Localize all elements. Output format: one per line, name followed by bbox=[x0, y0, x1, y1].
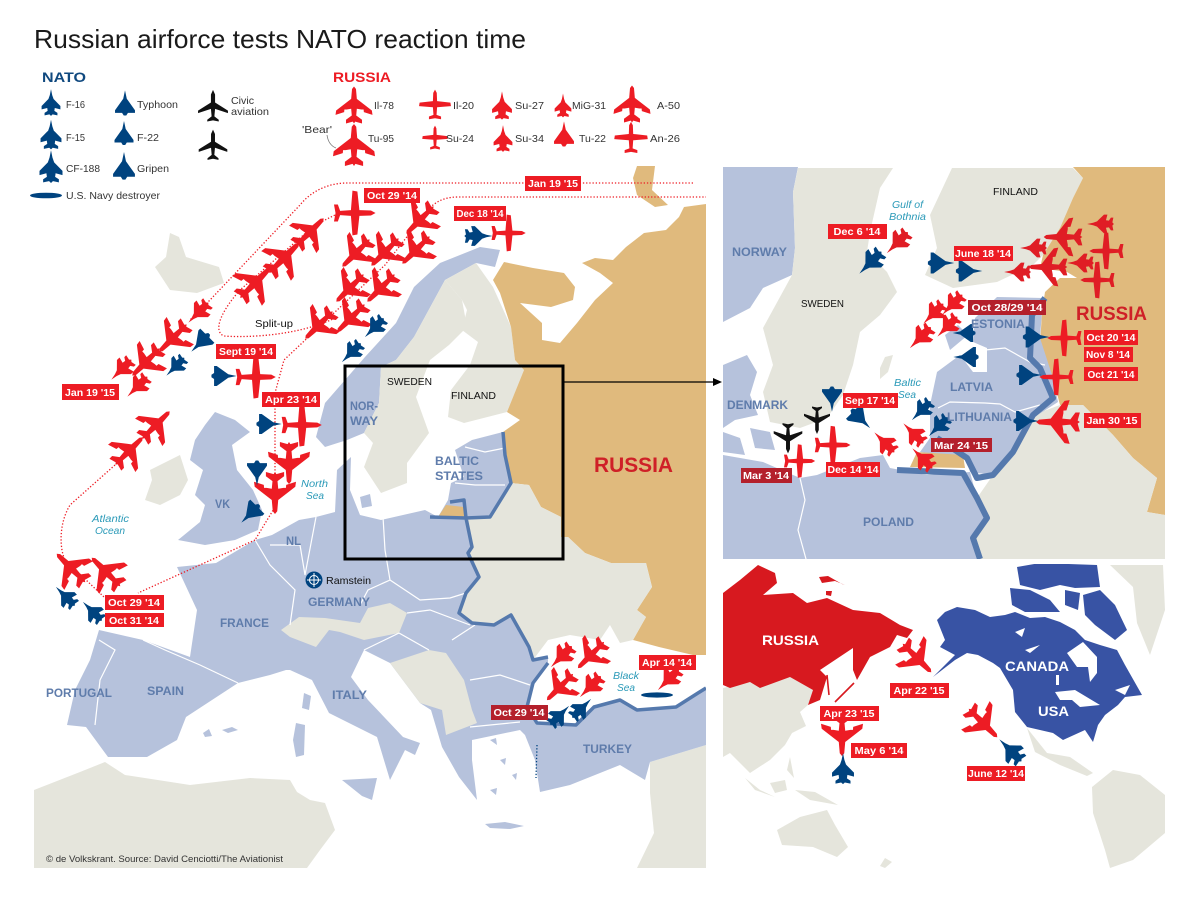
land: Sweden bbox=[763, 168, 897, 428]
legend: Russian aircraft: Tu-95 bbox=[368, 133, 394, 145]
Black Sea planes and destroyer bbox=[546, 635, 684, 729]
legend: NATO aircraft: CF-188 bbox=[66, 163, 100, 175]
panel: world inset map bbox=[723, 563, 1165, 868]
legend: Russian aircraft: RUSSIA bbox=[333, 69, 391, 85]
legend: civil aviation: aviation bbox=[231, 106, 269, 118]
legend: NATO aircraft: F-22 bbox=[137, 132, 159, 144]
land: Canadian Arctic islands bbox=[1010, 563, 1127, 640]
date labels: world inset: May 6 '14 bbox=[854, 745, 904, 757]
land: Mediterranean islands bbox=[203, 494, 524, 829]
date labels: main map: Jan 19 '15 bbox=[65, 387, 115, 399]
date labels: main map: Sept 19 '14 bbox=[219, 346, 273, 358]
land: Russia (red) bbox=[723, 565, 913, 705]
date labels: Baltic inset: Dec 6 '14 bbox=[834, 226, 881, 238]
panel: main Europe map bbox=[34, 166, 710, 868]
date labels: Baltic inset: Mar 3 '14 bbox=[743, 470, 789, 482]
land: New Zealand bbox=[880, 858, 892, 868]
land: Norway bbox=[316, 247, 500, 447]
title: Russian airforce tests NATO reaction time bbox=[34, 24, 526, 54]
inset map labels: ESTONIA bbox=[971, 317, 1025, 331]
date labels: Baltic inset: Mar 24 '15 bbox=[934, 440, 988, 452]
legend: NATO aircraft: U.S. Navy destroyer bbox=[66, 190, 160, 202]
map labels: Split-up bbox=[255, 318, 293, 330]
land: Asia bbox=[723, 677, 813, 773]
land: Gotland bbox=[880, 355, 893, 379]
land: North America mainland (blue) bbox=[933, 607, 1142, 742]
inset map labels: POLAND bbox=[863, 515, 914, 529]
inset map labels: Baltic bbox=[894, 377, 922, 389]
panel: Baltic inset map bbox=[723, 167, 1165, 559]
land: Greenland bbox=[1110, 565, 1165, 655]
black planes: civil aviation bbox=[774, 406, 830, 453]
legend: NATO aircraft: Typhoon bbox=[137, 99, 178, 111]
land: Great Britain bbox=[178, 412, 262, 545]
inset map labels: Bothnia bbox=[889, 211, 926, 223]
legend: Russian aircraft: An-26 bbox=[650, 133, 680, 145]
map labels: SWEDEN bbox=[387, 376, 432, 388]
red planes: northern route bbox=[42, 191, 526, 601]
date labels: Baltic inset: Dec 14 '14 bbox=[828, 464, 879, 476]
map labels: Ocean bbox=[95, 525, 125, 537]
inset map labels: FINLAND bbox=[993, 186, 1038, 198]
world map labels: USA bbox=[1038, 703, 1069, 719]
zoom rectangle on Baltic region bbox=[345, 366, 563, 559]
blue planes: NATO interceptors in Baltic bbox=[822, 244, 1049, 443]
legend: civil aviation: Civic bbox=[231, 95, 254, 107]
land: Belarus bbox=[973, 405, 1165, 559]
legend: NATO aircraft bbox=[30, 69, 178, 202]
date labels: main map: Apr 23 '14 bbox=[265, 394, 317, 406]
land: Belarus and Ukraine bbox=[459, 483, 652, 660]
inset map labels: LITHUANIA bbox=[947, 410, 1012, 424]
world map labels bbox=[762, 632, 1069, 719]
legend: NATO aircraft: F-15 bbox=[66, 132, 85, 144]
map labels: FINLAND bbox=[451, 390, 496, 402]
credit line: © de Volkskrant. Source: David Cenciotti/The Aviationist bbox=[46, 854, 283, 865]
date labels: main map: Dec 18 '14 bbox=[456, 208, 504, 220]
date labels: Baltic inset: Oct 28/29 '14 bbox=[972, 302, 1043, 314]
date labels: world inset: Apr 23 '15 bbox=[824, 708, 875, 720]
legend: NATO aircraft: NATO bbox=[42, 69, 86, 85]
date labels: Baltic inset bbox=[741, 224, 1141, 483]
date labels: Baltic inset: Sep 17 '14 bbox=[845, 395, 895, 407]
date labels: Baltic inset: June 18 '14 bbox=[955, 248, 1011, 260]
legend: civil aviation bbox=[198, 90, 269, 160]
inset map labels: RUSSIA bbox=[1076, 304, 1147, 325]
map labels: NL bbox=[286, 534, 301, 548]
map labels: PORTUGAL bbox=[46, 686, 112, 700]
date labels: Baltic inset: Oct 20 '14 bbox=[1086, 332, 1136, 344]
red planes: Estonia, Latvia, Lithuania bbox=[902, 288, 1081, 444]
land: Baltic states bbox=[920, 297, 1058, 475]
map labels: RUSSIA bbox=[594, 454, 673, 477]
land: Finland bbox=[445, 263, 524, 423]
land: Sweden bbox=[364, 280, 467, 493]
map labels: SPAIN bbox=[147, 684, 184, 698]
land: Estonian islands bbox=[945, 325, 965, 350]
blue planes: NATO interceptors bbox=[49, 226, 493, 627]
land: Kaliningrad bbox=[910, 452, 965, 468]
date labels: main map: Oct 31 '14 bbox=[109, 615, 159, 627]
date labels: Baltic inset: Oct 21 '14 bbox=[1088, 369, 1135, 381]
date labels: main map: Apr 14 '14 bbox=[642, 657, 692, 669]
land: Novaya Zemlya coast bbox=[633, 166, 668, 207]
land: Denmark bbox=[723, 355, 775, 455]
legend: Russian aircraft bbox=[302, 69, 680, 166]
date labels: main map: Oct 29 '14 bbox=[367, 190, 417, 202]
red planes: southern Baltic bbox=[784, 416, 939, 478]
legend: NATO aircraft: Gripen bbox=[137, 163, 169, 175]
map labels: VK bbox=[215, 497, 230, 511]
legend: Russian aircraft: Il-78 bbox=[374, 100, 394, 112]
land: Norway bbox=[723, 167, 798, 322]
date labels: Baltic inset: Jan 30 '15 bbox=[1086, 415, 1138, 427]
date labels: world inset: Apr 22 '15 bbox=[894, 685, 945, 697]
land: western Balkans bbox=[390, 650, 477, 735]
map labels: NOR- bbox=[350, 399, 378, 413]
NATO eastern border line bbox=[897, 298, 1053, 559]
flight routes bbox=[61, 183, 710, 778]
Pacific planes bbox=[821, 629, 1029, 784]
land: Central America bbox=[1027, 728, 1093, 776]
land: Kaliningrad bbox=[439, 505, 464, 516]
map labels: ITALY bbox=[332, 688, 367, 702]
date labels: main map: Oct 29 '14 bbox=[108, 597, 160, 609]
inset map labels: LATVIA bbox=[950, 380, 993, 394]
land: Russian Arctic islands bbox=[819, 576, 845, 596]
world map labels: RUSSIA bbox=[762, 632, 819, 648]
land: Russia bbox=[1040, 167, 1165, 515]
land: Australia bbox=[777, 810, 848, 857]
inset map labels: Gulf of bbox=[892, 199, 924, 211]
land: Germany and Poland bbox=[723, 455, 987, 559]
date labels: main map: Jan 19 '15 bbox=[528, 178, 578, 190]
legend: Russian aircraft: MiG-31 bbox=[572, 100, 606, 112]
land: Ireland bbox=[145, 455, 188, 505]
icon: Ramstein air base bbox=[306, 572, 322, 588]
date labels: Baltic inset: Nov 8 '14 bbox=[1086, 349, 1130, 361]
land: North Africa and Middle East bbox=[34, 233, 706, 868]
land: Sakhalin and Kurils bbox=[827, 675, 854, 702]
map labels: GERMANY bbox=[308, 595, 370, 609]
date labels: world inset: June 12 '14 bbox=[968, 768, 1024, 780]
legend: Russian aircraft: Su-24 bbox=[446, 133, 474, 145]
map labels: Sea bbox=[306, 490, 324, 502]
land: Iceland bbox=[155, 233, 224, 293]
map labels: FRANCE bbox=[220, 616, 269, 630]
legend: Russian aircraft: Il-20 bbox=[453, 100, 474, 112]
land: Hudson Bay and lakes bbox=[1015, 628, 1130, 707]
inset map labels: DENMARK bbox=[727, 398, 788, 412]
date labels: main map: Oct 29 '14 bbox=[494, 707, 545, 719]
land: Southeast Asia islands bbox=[745, 757, 838, 805]
red planes: Gulf of Finland bbox=[879, 215, 1123, 298]
map labels: STATES bbox=[435, 469, 483, 483]
arrow to Baltic inset bbox=[563, 378, 722, 386]
map labels: Black bbox=[613, 670, 640, 682]
inset map labels: Sea bbox=[898, 389, 916, 401]
inset map labels: NORWAY bbox=[732, 245, 787, 259]
land: Switzerland and Austria bbox=[281, 603, 407, 647]
legend: NATO aircraft: F-16 bbox=[66, 99, 85, 111]
map labels: BALTIC bbox=[435, 454, 479, 468]
inset map labels bbox=[727, 186, 1147, 529]
map labels: Ramstein bbox=[326, 575, 371, 587]
country borders bbox=[95, 447, 530, 727]
map labels: WAY bbox=[350, 414, 378, 428]
map labels: Atlantic bbox=[91, 513, 130, 525]
legend: Russian aircraft: Su-27 bbox=[515, 100, 544, 112]
map labels: TURKEY bbox=[583, 742, 632, 756]
legend: Russian aircraft: 'Bear' bbox=[302, 124, 332, 136]
map labels bbox=[46, 318, 673, 756]
NATO eastern border line bbox=[430, 432, 706, 725]
land: Russia bbox=[493, 204, 706, 655]
date labels: world inset bbox=[820, 683, 1025, 781]
map labels: North bbox=[301, 478, 328, 490]
map labels: Sea bbox=[617, 682, 635, 694]
inset map labels: SWEDEN bbox=[801, 298, 844, 310]
date labels: main map bbox=[62, 176, 696, 720]
land: South America bbox=[1092, 770, 1165, 868]
legend: Russian aircraft: Su-34 bbox=[515, 133, 544, 145]
land: NATO continental Europe bbox=[67, 432, 706, 800]
Baltic internal borders bbox=[938, 348, 1045, 412]
legend: Russian aircraft: Tu-22 bbox=[579, 133, 606, 145]
land: Finland bbox=[925, 168, 1083, 288]
world map labels: CANADA bbox=[1005, 658, 1069, 674]
legend: Russian aircraft: A-50 bbox=[657, 100, 680, 112]
